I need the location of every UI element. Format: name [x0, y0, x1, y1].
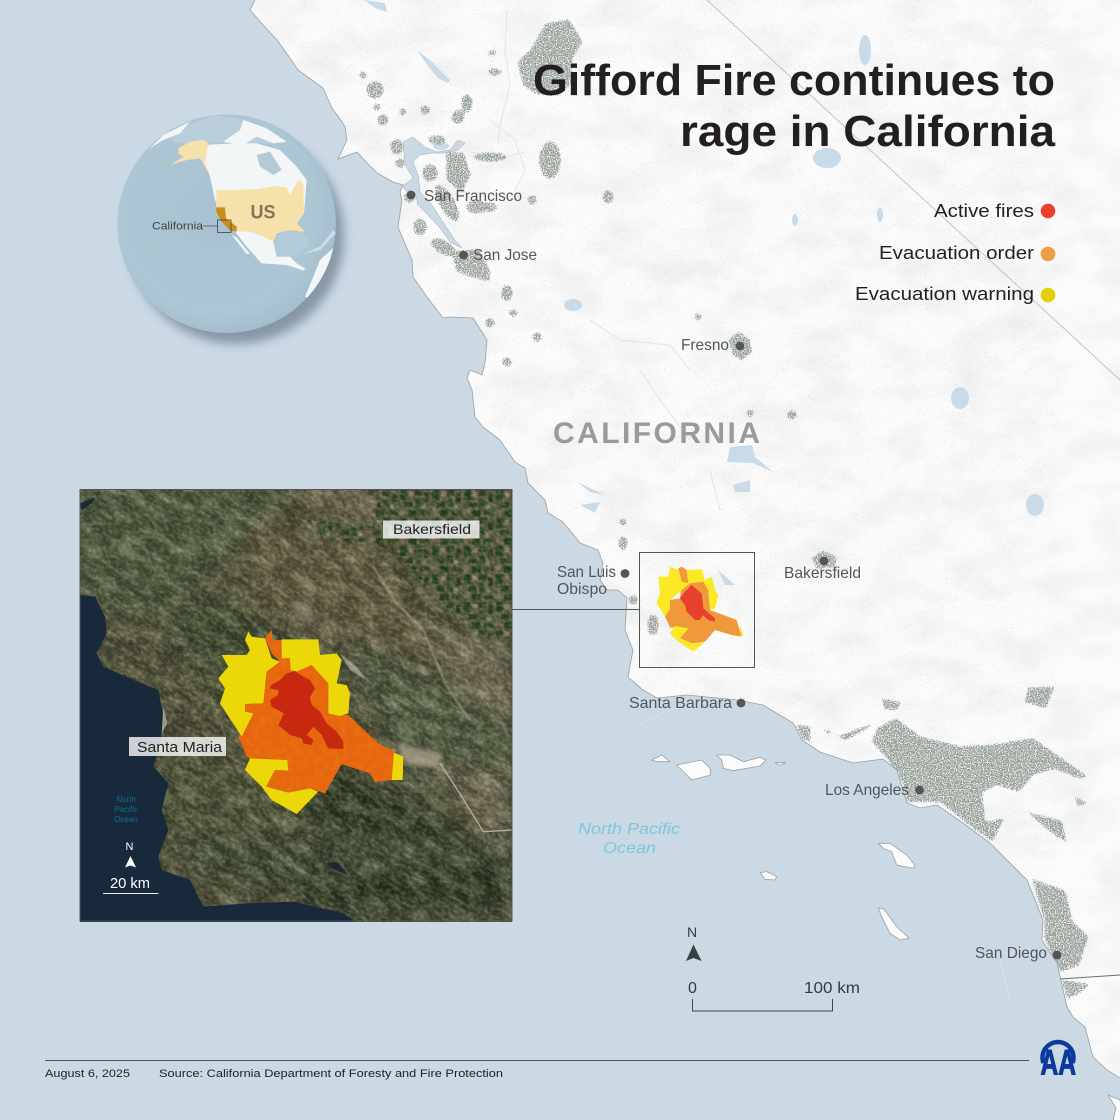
legend: evacuation warning: Evacuation warning	[855, 284, 1034, 304]
scale bar: main map: 0	[688, 980, 697, 997]
fire polygons	[657, 567, 743, 652]
globe locator	[117, 114, 344, 344]
land: baja california	[232, 235, 250, 254]
inset compass: N	[126, 841, 134, 853]
city: San Jose: San Jose	[473, 247, 537, 264]
city: San Diego: San Diego	[975, 945, 1047, 962]
logo: Anadolu Agency	[1040, 1042, 1076, 1082]
ocean label: North Pacific	[578, 821, 680, 838]
inset label: Bakersfield: Bakersfield	[393, 521, 471, 537]
terrain patches	[160, 490, 512, 920]
hawaii	[148, 245, 150, 249]
inset frame	[80, 490, 512, 921]
inset fire polygons	[218, 630, 403, 814]
base map	[250, 0, 1120, 1120]
fire extent on main map	[512, 552, 754, 668]
san francisco bay	[403, 137, 465, 248]
connector line	[512, 608, 639, 610]
footer	[45, 1042, 1076, 1082]
reservoirs	[327, 862, 348, 875]
city: Los Angeles: Los Angeles	[825, 782, 909, 799]
city: San Luis Obispo: Obispo	[557, 581, 607, 598]
evacuation warning north east	[282, 639, 350, 716]
hudson bay	[257, 152, 282, 175]
lakes	[364, 0, 1052, 585]
inset ocean label: North	[116, 795, 136, 804]
inset compass	[125, 841, 136, 868]
state border	[707, 0, 1120, 380]
title	[533, 56, 1056, 156]
evacuation warning east	[392, 753, 403, 780]
evacuation warning west	[218, 632, 280, 737]
scale bar: main map	[688, 980, 860, 1011]
city: Bakersfield	[784, 557, 861, 582]
inset scale bar: 20 km	[110, 875, 150, 892]
evacuation warning south	[245, 758, 318, 814]
inset scale bar	[103, 875, 158, 894]
scale bar: main map: 100 km	[804, 980, 860, 997]
terrain base	[80, 490, 512, 922]
urban areas north	[358, 18, 838, 637]
source: Source: California Department of Foresty and Fire Protection	[159, 1068, 503, 1080]
inset ocean label: Ocean	[114, 815, 138, 824]
ocean label	[578, 821, 680, 857]
evacuation order zone	[238, 630, 395, 793]
us mexico border	[1060, 975, 1120, 979]
agricultural fields	[397, 743, 443, 767]
land: north america	[203, 143, 307, 271]
land: south america	[305, 248, 334, 298]
region label: California: CALIFORNIA	[553, 417, 760, 450]
california highlight	[216, 207, 237, 232]
city: San Francisco: San Francisco	[424, 188, 522, 205]
city: Bakersfield: Bakersfield	[784, 565, 861, 582]
city labels	[407, 188, 1061, 962]
land: siberia	[148, 122, 190, 150]
compass: main map	[686, 924, 702, 961]
compass: main map: N	[687, 924, 697, 940]
ocean label: Ocean	[603, 840, 656, 857]
alaska	[170, 140, 210, 175]
california land mass	[250, 0, 1120, 1120]
road	[440, 763, 512, 832]
caribbean islands	[300, 230, 336, 255]
logo: Anadolu Agency: AA	[1040, 1044, 1076, 1082]
farmland	[307, 490, 512, 637]
united states	[216, 180, 305, 242]
inset label: Bakersfield	[383, 520, 480, 538]
land: arctic islands	[223, 120, 287, 145]
globe label: California	[152, 220, 231, 232]
fire texture	[238, 630, 395, 793]
title: Gifford Fire continues to	[533, 56, 1055, 105]
ridge texture	[80, 490, 512, 922]
legend	[855, 201, 1055, 304]
gulf of mexico	[275, 231, 292, 255]
globe label: US: US	[250, 202, 276, 224]
city: San Luis Obispo: San Luis	[557, 564, 616, 581]
inset label: Santa Maria	[129, 737, 226, 756]
legend: evacuation order: Evacuation order	[879, 243, 1034, 263]
title: rage in California	[680, 107, 1056, 156]
rivers	[470, 10, 1010, 1000]
city: San Luis Obispo	[557, 564, 629, 598]
legend: active fires: Active fires	[934, 201, 1034, 221]
globe shadow	[128, 128, 344, 344]
dry wash	[373, 567, 470, 720]
inset ocean label	[114, 795, 138, 824]
inset label: Santa Maria: Santa Maria	[137, 740, 223, 756]
coastal dunes	[162, 707, 167, 733]
city: Fresno: Fresno	[681, 337, 729, 354]
active fire	[269, 671, 343, 749]
globe label: California: California	[152, 220, 204, 232]
date: August 6, 2025	[45, 1068, 130, 1080]
urban areas south	[793, 685, 1093, 1000]
locator frame	[640, 552, 754, 668]
globe sphere	[117, 114, 340, 333]
fine terrain texture	[80, 490, 512, 922]
light arctic sea	[167, 115, 287, 143]
city: Santa Barbara: Santa Barbara	[629, 695, 732, 712]
inset ocean label: Pacific	[114, 805, 138, 814]
channel islands	[652, 755, 915, 940]
satellite inset map	[80, 489, 512, 922]
pacific ocean	[80, 595, 357, 922]
